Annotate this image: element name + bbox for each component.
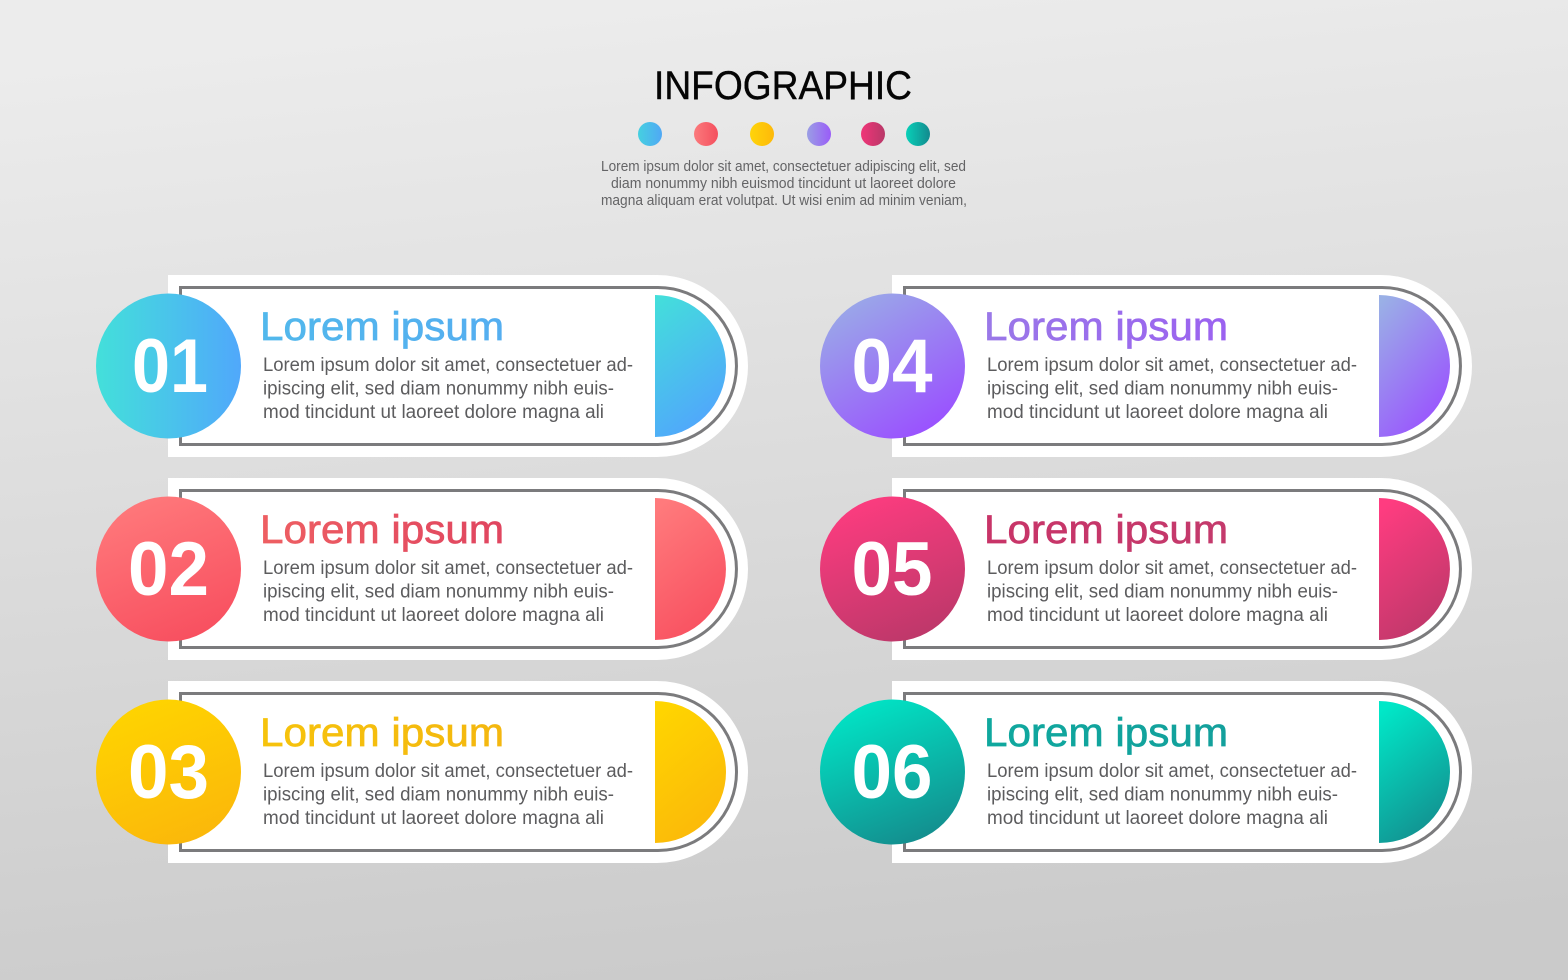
heading 02: Lorem ipsum: [260, 508, 504, 552]
half circle 02: [655, 498, 726, 640]
panel: item 03: [96, 681, 748, 863]
body text 06: ipiscing elit, sed diam nonummy nibh euis-: [987, 784, 1338, 806]
number badge 02: [96, 496, 241, 642]
heading 01: Lorem ipsum: [260, 305, 504, 349]
panel: item 01: [96, 275, 748, 457]
body text 03: ipiscing elit, sed diam nonummy nibh euis-: [263, 784, 614, 806]
number badge 02: 02: [128, 527, 209, 612]
body text 01: mod tincidunt ut laoreet dolore magna ali: [263, 402, 604, 423]
body text 02: Lorem ipsum dolor sit amet, consectetuer ad-: [263, 558, 633, 579]
body text 02: ipiscing elit, sed diam nonummy nibh euis-: [263, 582, 614, 602]
panel: item 05: [820, 478, 1472, 660]
body text 06: mod tincidunt ut laoreet dolore magna ali: [987, 808, 1328, 829]
number badge 05: 05: [852, 527, 932, 612]
half circle 06: [1379, 701, 1450, 843]
body text 04: [987, 355, 1357, 423]
number badge 05: [820, 496, 965, 642]
body text 03: mod tincidunt ut laoreet dolore magna ali: [263, 808, 604, 829]
panel: item 02: [96, 478, 748, 660]
body text 05: Lorem ipsum dolor sit amet, consectetuer ad-: [987, 558, 1357, 579]
body text 04: ipiscing elit, sed diam nonummy nibh euis-: [987, 378, 1338, 400]
heading 05: Lorem ipsum: [984, 508, 1228, 552]
number badge 06: 06: [852, 730, 932, 815]
body text 05: [987, 558, 1357, 626]
heading 06: Lorem ipsum: [984, 711, 1228, 755]
heading 03: Lorem ipsum: [260, 711, 504, 755]
half circle 04: [1379, 295, 1450, 437]
body text 05: ipiscing elit, sed diam nonummy nibh euis-: [987, 582, 1338, 602]
intro text: [601, 159, 967, 209]
body text 06: Lorem ipsum dolor sit amet, consectetuer ad-: [987, 761, 1357, 782]
body text 04: mod tincidunt ut laoreet dolore magna ali: [987, 402, 1328, 423]
body text 01: Lorem ipsum dolor sit amet, consectetuer ad-: [263, 355, 633, 376]
number badge 04: [820, 294, 965, 438]
title: INFOGRAPHIC: [654, 64, 912, 108]
body text 01: ipiscing elit, sed diam nonummy nibh euis-: [263, 378, 614, 400]
body text 06: [987, 761, 1357, 829]
colour dots row: [638, 122, 930, 146]
half circle 01: [655, 295, 726, 437]
intro text: Lorem ipsum dolor sit amet, consectetuer adipiscing elit, sed: [601, 159, 966, 175]
number badge 06: [820, 700, 965, 844]
number badge 04: 04: [852, 324, 932, 409]
number badge 01: 01: [132, 324, 208, 409]
half circle 03: [655, 701, 726, 843]
half circle 05: [1379, 498, 1450, 640]
body text 03: Lorem ipsum dolor sit amet, consectetuer ad-: [263, 761, 633, 782]
intro text: diam nonummy nibh euismod tincidunt ut laoreet dolore: [611, 176, 956, 192]
body text 01: [263, 355, 633, 423]
number badge 03: [96, 700, 241, 844]
body text 05: mod tincidunt ut laoreet dolore magna ali: [987, 605, 1328, 626]
body text 02: mod tincidunt ut laoreet dolore magna ali: [263, 605, 604, 626]
intro text: magna aliquam erat volutpat. Ut wisi enim ad minim veniam,: [601, 193, 967, 209]
body text 04: Lorem ipsum dolor sit amet, consectetuer ad-: [987, 355, 1357, 376]
panel: item 04: [820, 275, 1472, 457]
body text 03: [263, 761, 633, 829]
number badge 03: 03: [128, 730, 209, 815]
body text 02: [263, 558, 633, 626]
number badge 01: [96, 294, 241, 438]
heading 04: Lorem ipsum: [984, 305, 1228, 349]
panel: item 06: [820, 681, 1472, 863]
